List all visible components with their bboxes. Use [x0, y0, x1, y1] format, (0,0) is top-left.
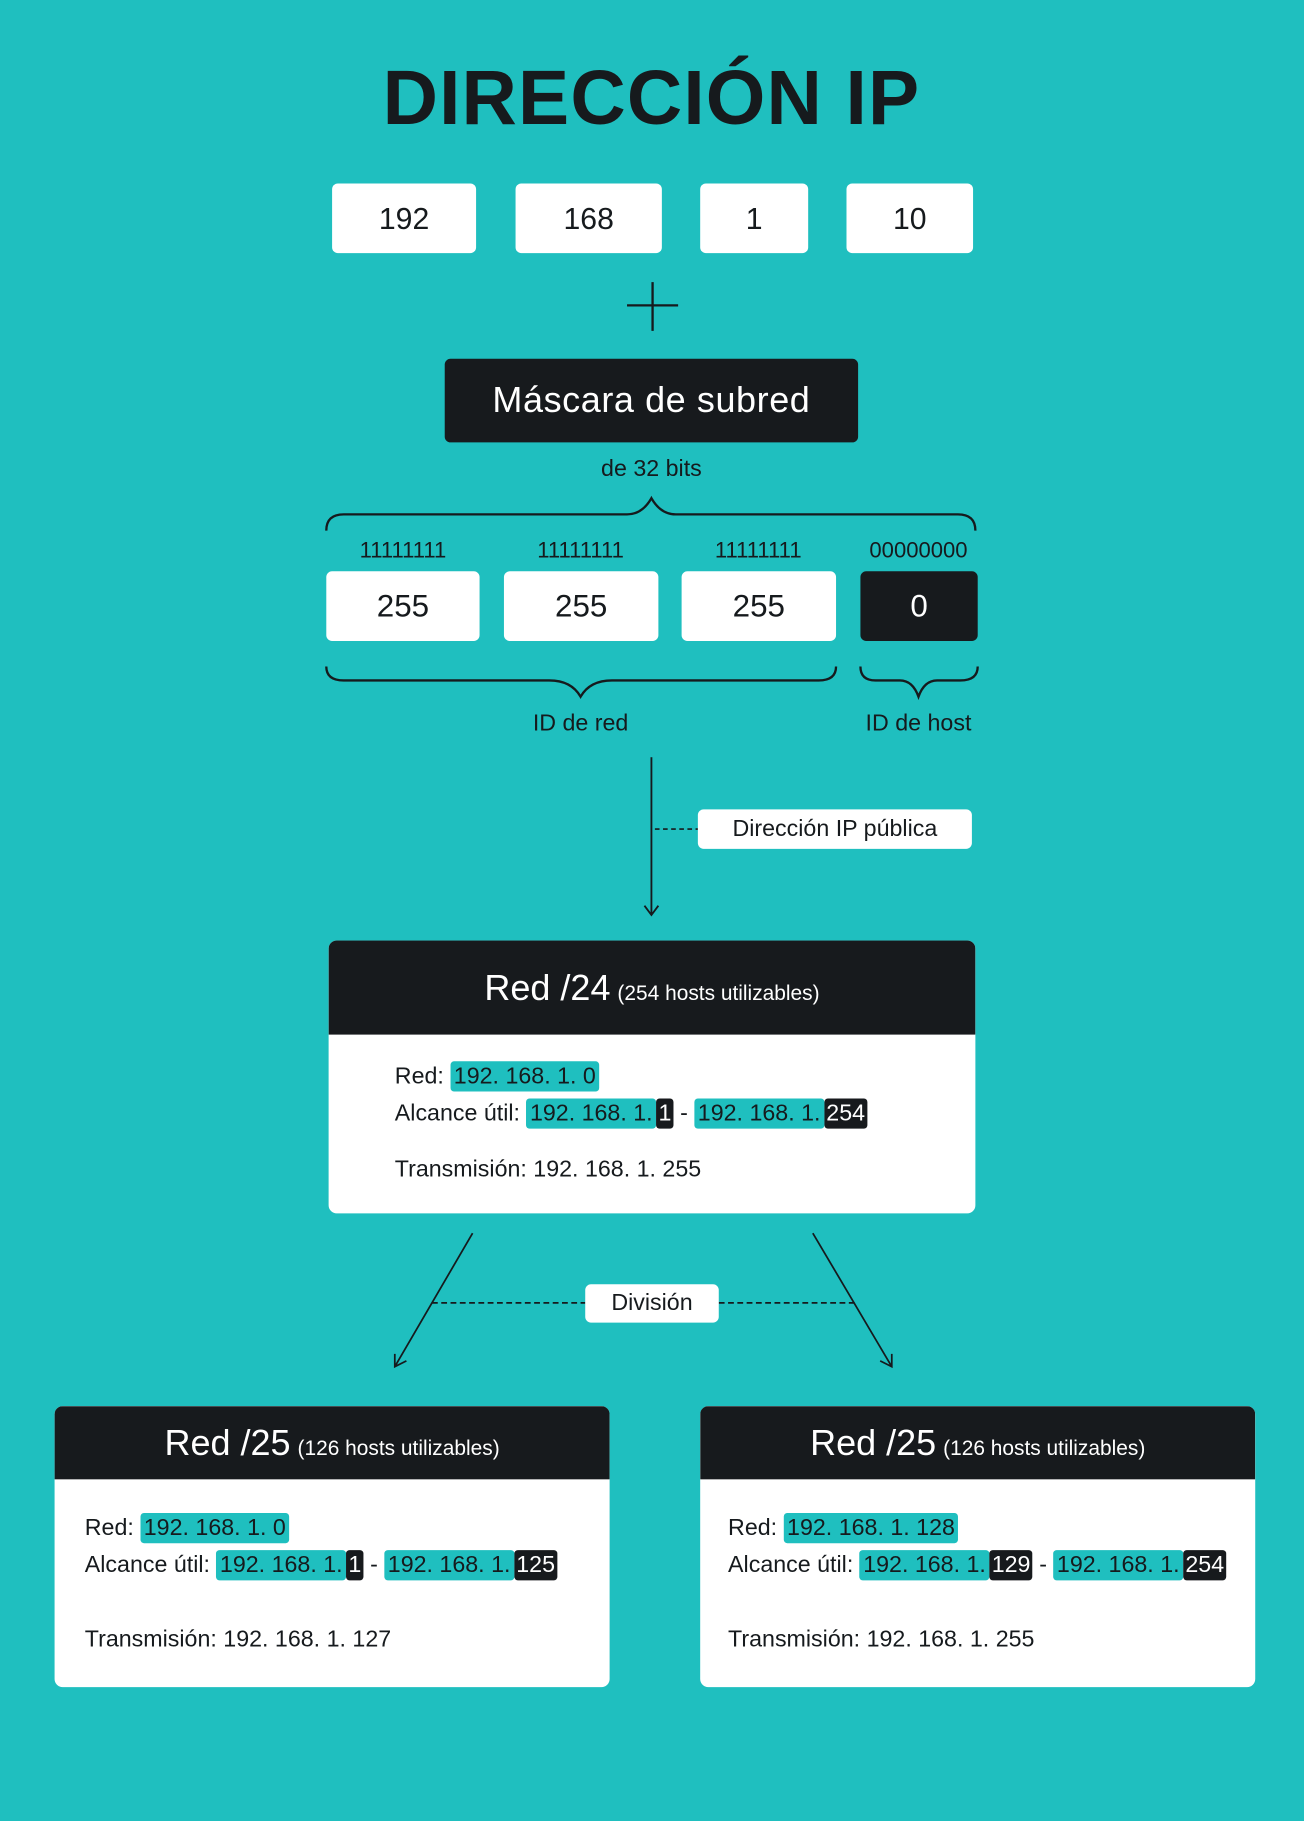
mask octets: 11111111 [715, 539, 802, 563]
header: Red /24 (254 hosts utilizables) [484, 967, 820, 1007]
mask box 0 [860, 571, 978, 641]
mask box 0: 0 [910, 588, 928, 623]
details [728, 1513, 958, 1544]
panel: /25 left: Transmisión: 192. 168. 1. 127 [85, 1627, 391, 1652]
panel: /24 [329, 941, 975, 1213]
panel: /25 right: Alcance útil: - [728, 1552, 1047, 1578]
panel: /24: 192. 168. 1. [698, 1101, 820, 1126]
binary labels: 11111111 [360, 539, 446, 563]
details: 192. 168. 1. 128 [787, 1515, 955, 1541]
panel: /24: Alcance útil: - [395, 1101, 688, 1126]
header: Red /25 (126 hosts utilizables) [810, 1422, 1145, 1462]
panel: /25 left: 125 [516, 1552, 555, 1578]
subnet mask label: Máscara de subred [492, 380, 810, 420]
callout: División [585, 1284, 719, 1323]
brace top [325, 496, 976, 531]
panel: /24: 192. 168. 1. [530, 1101, 653, 1126]
label ID de host: ID de host [866, 711, 971, 736]
details: Red: [728, 1515, 777, 1541]
octet 192: 192 [379, 200, 429, 235]
panel: /25 right: 192. 168. 1. [1057, 1552, 1180, 1578]
title: DIRECCIÓN IP [383, 55, 920, 141]
arrows: division [394, 1232, 893, 1368]
panel: /25 left: 192. 168. 1. [388, 1552, 510, 1578]
panel: /25 right: 192. 168. 1. [863, 1552, 986, 1578]
mask octets: 11111111 [537, 539, 624, 563]
octet 1: 1 [746, 200, 763, 235]
octet 10 [846, 183, 973, 253]
mask box 255 [682, 571, 836, 641]
mask box 255 [326, 571, 480, 641]
subnet mask label [445, 359, 858, 442]
details: Red: [395, 1064, 444, 1089]
octet 168: 168 [564, 200, 614, 235]
octet 192 [332, 183, 476, 253]
octet 10: 10 [893, 200, 927, 235]
arrow down [644, 757, 698, 916]
panel: /24: 254 [826, 1101, 865, 1126]
mask box 255: 255 [377, 588, 429, 623]
header [329, 941, 975, 1035]
details: 192. 168. 1. 0 [454, 1064, 596, 1089]
details [85, 1513, 290, 1544]
mask box 255 [504, 571, 658, 641]
details [395, 1061, 600, 1092]
mask box 255: 255 [733, 588, 785, 623]
header [55, 1406, 610, 1479]
ip octets [332, 184, 974, 254]
panel: /25 left: 192. 168. 1. [220, 1552, 343, 1578]
panel: /25 right: 254 [1185, 1552, 1224, 1578]
octet 1 [700, 183, 808, 253]
de 32 bits: de 32 bits [601, 456, 702, 482]
details: 192. 168. 1. 0 [144, 1515, 286, 1541]
mask octets [326, 539, 978, 641]
panel: /25 right [700, 1406, 1255, 1687]
octet 168 [516, 183, 662, 253]
panel: /25 left: Alcance útil: - [85, 1552, 378, 1578]
details: Red: [85, 1515, 134, 1541]
mask octets: 00000000 [869, 539, 968, 563]
callout: public IP: Dirección IP pública [732, 816, 937, 841]
mask box 255: 255 [555, 588, 607, 623]
panel: /24: Transmisión: 192. 168. 1. 255 [395, 1157, 701, 1182]
panel: /25 left [55, 1406, 610, 1687]
icon: plus [627, 282, 678, 331]
panel: /25 left: 1 [348, 1552, 361, 1578]
brace bottom [325, 666, 979, 700]
header [700, 1406, 1255, 1479]
panel: /24: 1 [658, 1101, 671, 1126]
panel: /25 right: Transmisión: 192. 168. 1. 255 [728, 1627, 1034, 1652]
panel: /25 right: 129 [992, 1552, 1030, 1578]
callout: División: División [611, 1290, 693, 1316]
label ID de red: ID de red [533, 711, 628, 736]
header: Red /25 (126 hosts utilizables) [164, 1422, 500, 1462]
callout: public IP [698, 809, 972, 849]
